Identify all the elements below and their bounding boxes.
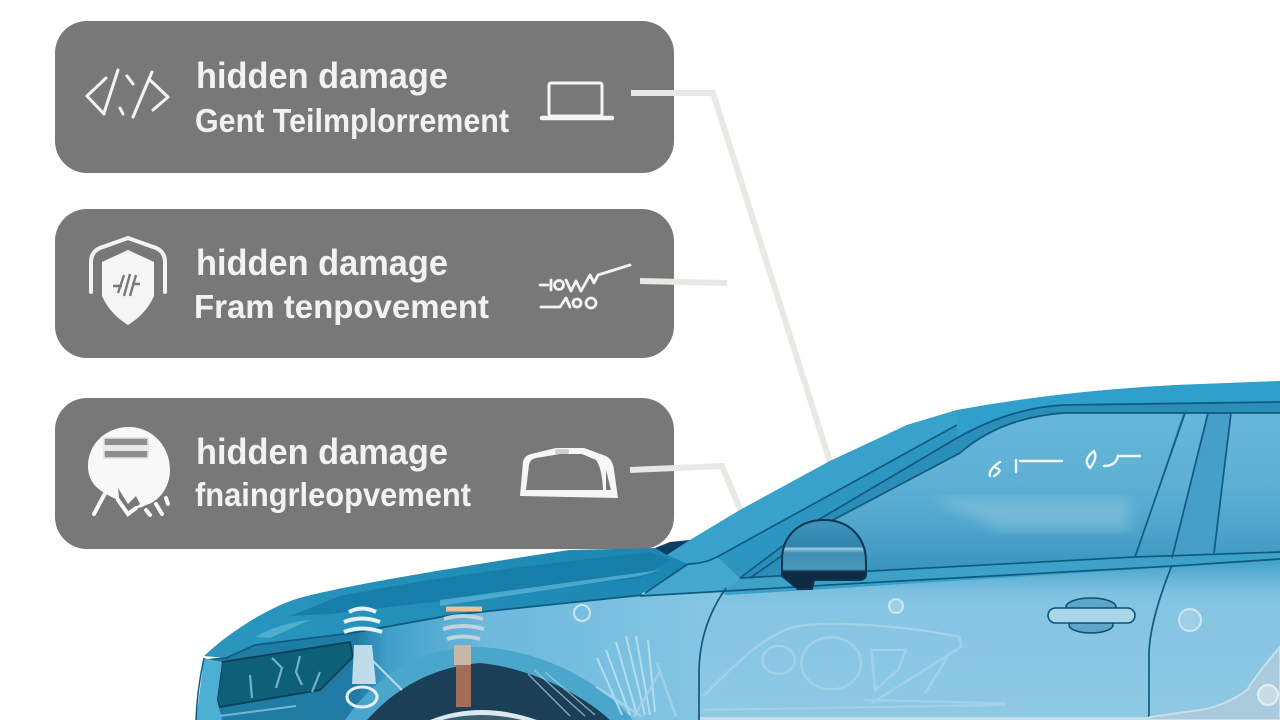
panel: bottom: [55, 398, 674, 549]
icon: signal lines: [540, 265, 630, 308]
tyre rim: [430, 710, 537, 720]
panel background: [55, 21, 674, 173]
heading: hidden damage: [196, 431, 448, 472]
rear wheel arch: [1150, 647, 1280, 720]
reflection: white coil: [344, 608, 402, 707]
wheel arch outer ring: [345, 647, 633, 720]
car body: hood: [204, 548, 688, 658]
panel background: [55, 398, 674, 549]
cowl triangle: [640, 557, 745, 596]
lower grille line: [220, 706, 296, 716]
fender scratch fan: [597, 636, 655, 715]
roof rail band: [957, 381, 1280, 438]
icon: shield: [91, 238, 165, 325]
windshield strip: [667, 410, 957, 564]
faint door sketch: [596, 624, 1005, 717]
car illustration: [196, 381, 1280, 720]
rear pillar: [1172, 413, 1231, 555]
pillar band: [717, 425, 960, 578]
connector lines: [630, 93, 830, 514]
rear window: [1214, 413, 1280, 552]
connector: middle panel: [640, 281, 727, 283]
belt band: [720, 552, 1280, 594]
subheading: fnaingrleopvement: [195, 476, 471, 513]
panel background: [55, 209, 674, 358]
frame band above window: [740, 402, 1280, 578]
reflection: orange coil: [443, 609, 484, 707]
hood dark shading band: [290, 552, 670, 616]
arch scratch marks: [528, 670, 595, 716]
arch fill: [1150, 647, 1280, 720]
car body: doors: [680, 558, 1280, 720]
door mirror: [782, 520, 866, 589]
front window: [800, 413, 1183, 574]
window reflection: [930, 498, 1130, 530]
wheel arch: [367, 663, 610, 720]
connector: top panel to car: [631, 93, 830, 462]
panel: middle: [55, 209, 674, 358]
headlight: [217, 642, 353, 707]
subheading: Fram tenpovement: [194, 288, 489, 325]
door dents: [574, 599, 1201, 631]
icon: laptop: [542, 83, 612, 118]
window marks: [990, 451, 1140, 476]
icon: case outline: [520, 448, 618, 498]
door sill: [700, 717, 1150, 720]
heading: hidden damage: [196, 55, 448, 96]
door handle: [1048, 598, 1135, 633]
central pillar: [1135, 413, 1208, 559]
front edge: [196, 658, 222, 720]
headlight marks: [250, 656, 320, 698]
heading: hidden damage: [196, 242, 448, 283]
connector: bottom panel to car: [630, 466, 742, 514]
arch dent: [1258, 685, 1278, 705]
icon: damage blob: [88, 427, 170, 515]
body lines: [207, 402, 1280, 720]
car body: roof and upper structure: [655, 381, 1280, 600]
hood highlight: [255, 570, 660, 638]
bumper line: [196, 658, 204, 720]
dark wedge at windshield base: [655, 540, 690, 555]
inner wheel hub: [442, 715, 522, 720]
car body: front fender: [196, 588, 730, 720]
icon: code brackets: [87, 70, 168, 117]
subheading: Gent Teilmplorrement: [195, 102, 509, 139]
panel: top: [55, 21, 674, 173]
